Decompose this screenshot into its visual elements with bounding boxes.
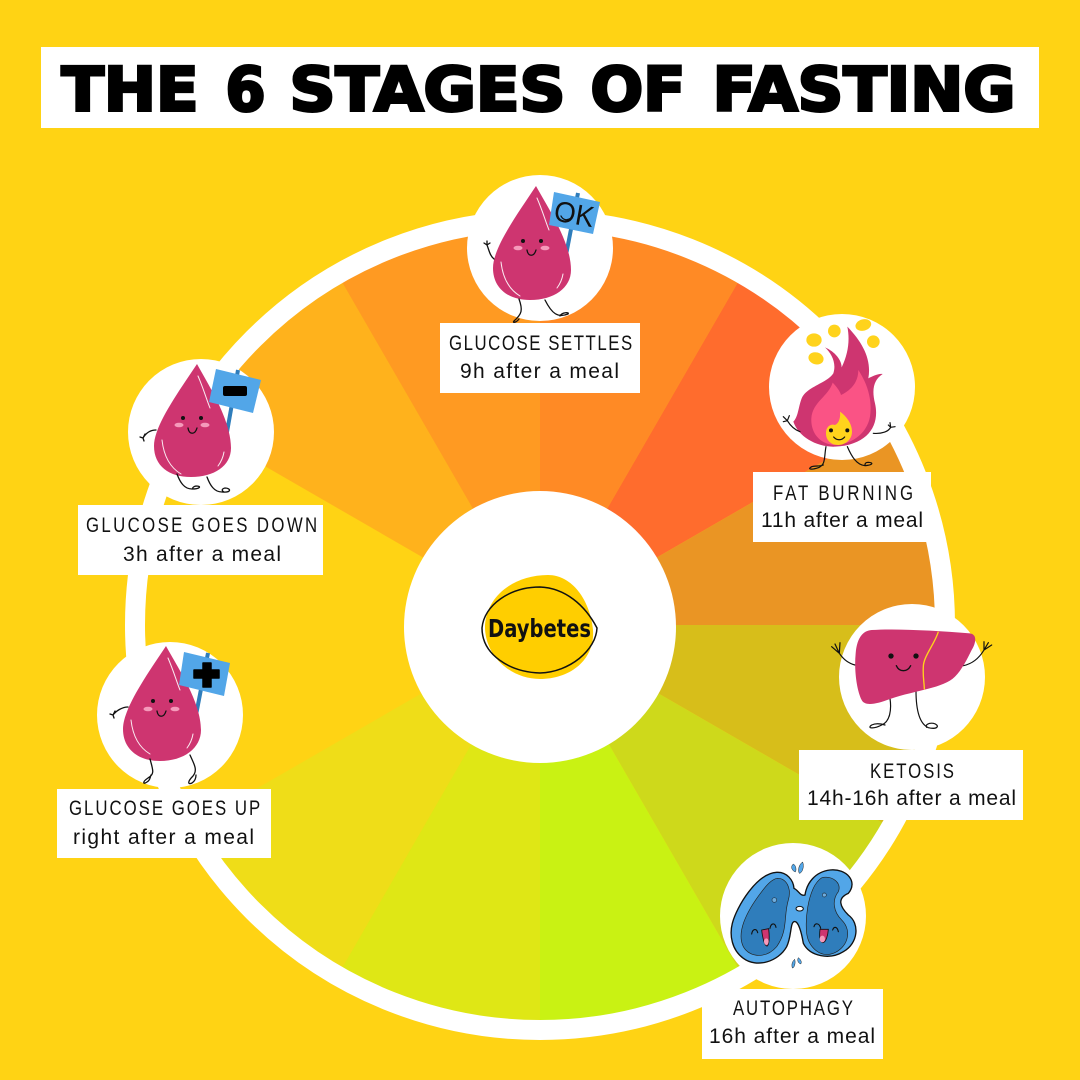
label: autophagy: 16h after a meal xyxy=(709,1025,875,1048)
icon: blood drop with plus sign xyxy=(110,646,230,784)
center logo: Daybetes xyxy=(488,614,591,643)
label: glucose goes up xyxy=(57,789,271,858)
label: glucose goes up: GLUCOSE GOES UP xyxy=(69,797,260,821)
title: OF xyxy=(590,56,686,126)
label: ketosis: KETOSIS xyxy=(870,760,954,784)
label: fat burning xyxy=(753,472,931,542)
label: fat burning: FAT BURNING xyxy=(773,482,913,506)
stage: glucose settles xyxy=(440,175,640,393)
title: 6 xyxy=(226,56,266,126)
icon: blood drop with OK sign: OK xyxy=(552,196,597,234)
label: glucose goes up: right after a meal xyxy=(73,826,254,849)
icon: blood drop with OK sign xyxy=(484,186,600,322)
fasting wheel xyxy=(135,220,945,1030)
icon: blood drop with minus sign xyxy=(140,364,261,492)
icon: cell character xyxy=(731,862,856,968)
label: glucose goes down: 3h after a meal xyxy=(123,543,281,566)
stage: ketosis xyxy=(799,604,1023,820)
label: glucose settles: GLUCOSE SETTLES xyxy=(449,332,632,356)
label: glucose goes down: GLUCOSE GOES DOWN xyxy=(86,514,317,538)
label: autophagy xyxy=(702,989,883,1059)
label: autophagy: AUTOPHAGY xyxy=(733,997,853,1021)
label: ketosis xyxy=(799,750,1023,820)
label: glucose settles xyxy=(440,323,640,393)
title: THE xyxy=(62,56,198,126)
center logo xyxy=(404,491,676,763)
title xyxy=(41,47,1039,128)
label: glucose settles: 9h after a meal xyxy=(460,360,619,383)
stage: glucose goes down xyxy=(78,359,323,575)
label: glucose goes down xyxy=(78,505,323,575)
icon: flame character xyxy=(783,317,895,469)
stage: glucose goes up xyxy=(57,642,271,858)
label: ketosis: 14h-16h after a meal xyxy=(807,787,1016,810)
title: FASTING xyxy=(712,56,1016,126)
icon: liver character xyxy=(832,629,992,728)
stage: autophagy xyxy=(702,843,883,1059)
label: fat burning: 11h after a meal xyxy=(761,509,923,532)
stage: fat burning xyxy=(753,314,931,542)
title: STAGES xyxy=(290,56,566,126)
